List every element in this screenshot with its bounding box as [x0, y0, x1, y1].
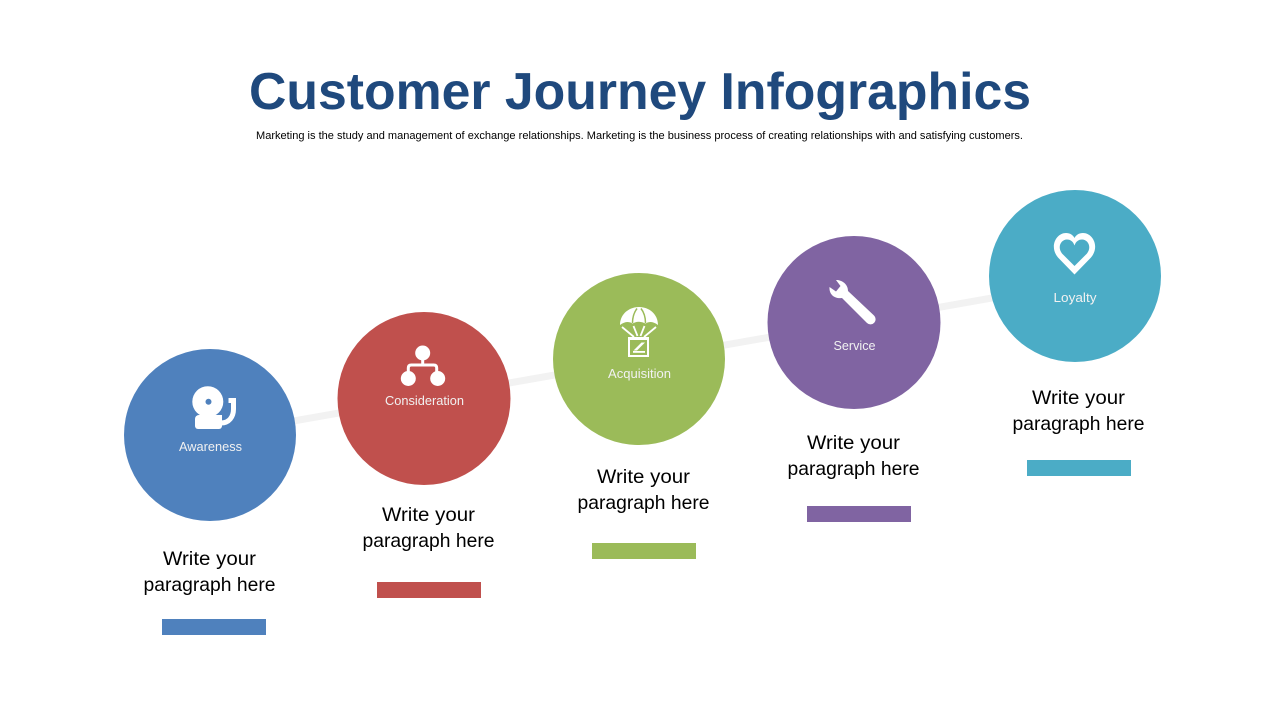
accent bar: loyalty — [1027, 460, 1131, 476]
label: awareness: Awareness — [179, 440, 242, 454]
accent bar: acquisition — [592, 543, 696, 559]
accent bar: awareness — [162, 619, 266, 635]
service circle — [768, 236, 940, 409]
accent bar: service — [807, 506, 911, 522]
paragraph: acquisition: Write your — [597, 466, 691, 488]
label: acquisition: Acquisition — [608, 367, 671, 381]
paragraph: service — [788, 432, 920, 480]
paragraph: consideration — [362, 504, 494, 552]
icon: alarm bell — [192, 386, 234, 429]
step 2: consideration — [338, 312, 510, 598]
title: Customer Journey Infographics — [249, 63, 1031, 121]
icon: parachute with box — [620, 307, 658, 357]
paragraph: consideration: Write your — [382, 504, 476, 526]
subtitle text: Marketing is the study and management of exchange relationships. Marketing is the business process of creating relationships with and satisfying customers. — [256, 130, 1023, 142]
label: consideration: Consideration — [385, 394, 464, 408]
acquisition circle — [553, 273, 725, 445]
paragraph: awareness: paragraph here — [144, 574, 276, 596]
accent bar: consideration — [377, 582, 481, 598]
loyalty circle — [989, 190, 1161, 362]
step 4: service — [768, 236, 940, 522]
icon: wrench — [829, 280, 876, 324]
paragraph: consideration: paragraph here — [362, 530, 494, 552]
paragraph: service: Write your — [807, 432, 901, 454]
paragraph: awareness: Write your — [163, 548, 257, 570]
journey connector line — [210, 283, 1075, 436]
paragraph: service: paragraph here — [788, 458, 920, 480]
icon: heart — [1054, 233, 1095, 274]
paragraph: acquisition — [578, 466, 710, 514]
paragraph: awareness — [144, 548, 276, 596]
paragraph: acquisition: paragraph here — [578, 492, 710, 514]
step 3: acquisition — [553, 273, 725, 559]
paragraph: loyalty: paragraph here — [1012, 413, 1144, 435]
awareness circle — [124, 349, 296, 521]
consideration circle — [338, 312, 510, 485]
step 1: awareness — [124, 349, 296, 635]
label: loyalty: Loyalty — [1054, 291, 1097, 305]
paragraph: loyalty: Write your — [1032, 387, 1126, 409]
paragraph: loyalty — [1012, 387, 1144, 435]
label: service: Service — [834, 339, 876, 353]
icon: hierarchy — [401, 346, 445, 386]
step 5: loyalty — [989, 190, 1161, 476]
